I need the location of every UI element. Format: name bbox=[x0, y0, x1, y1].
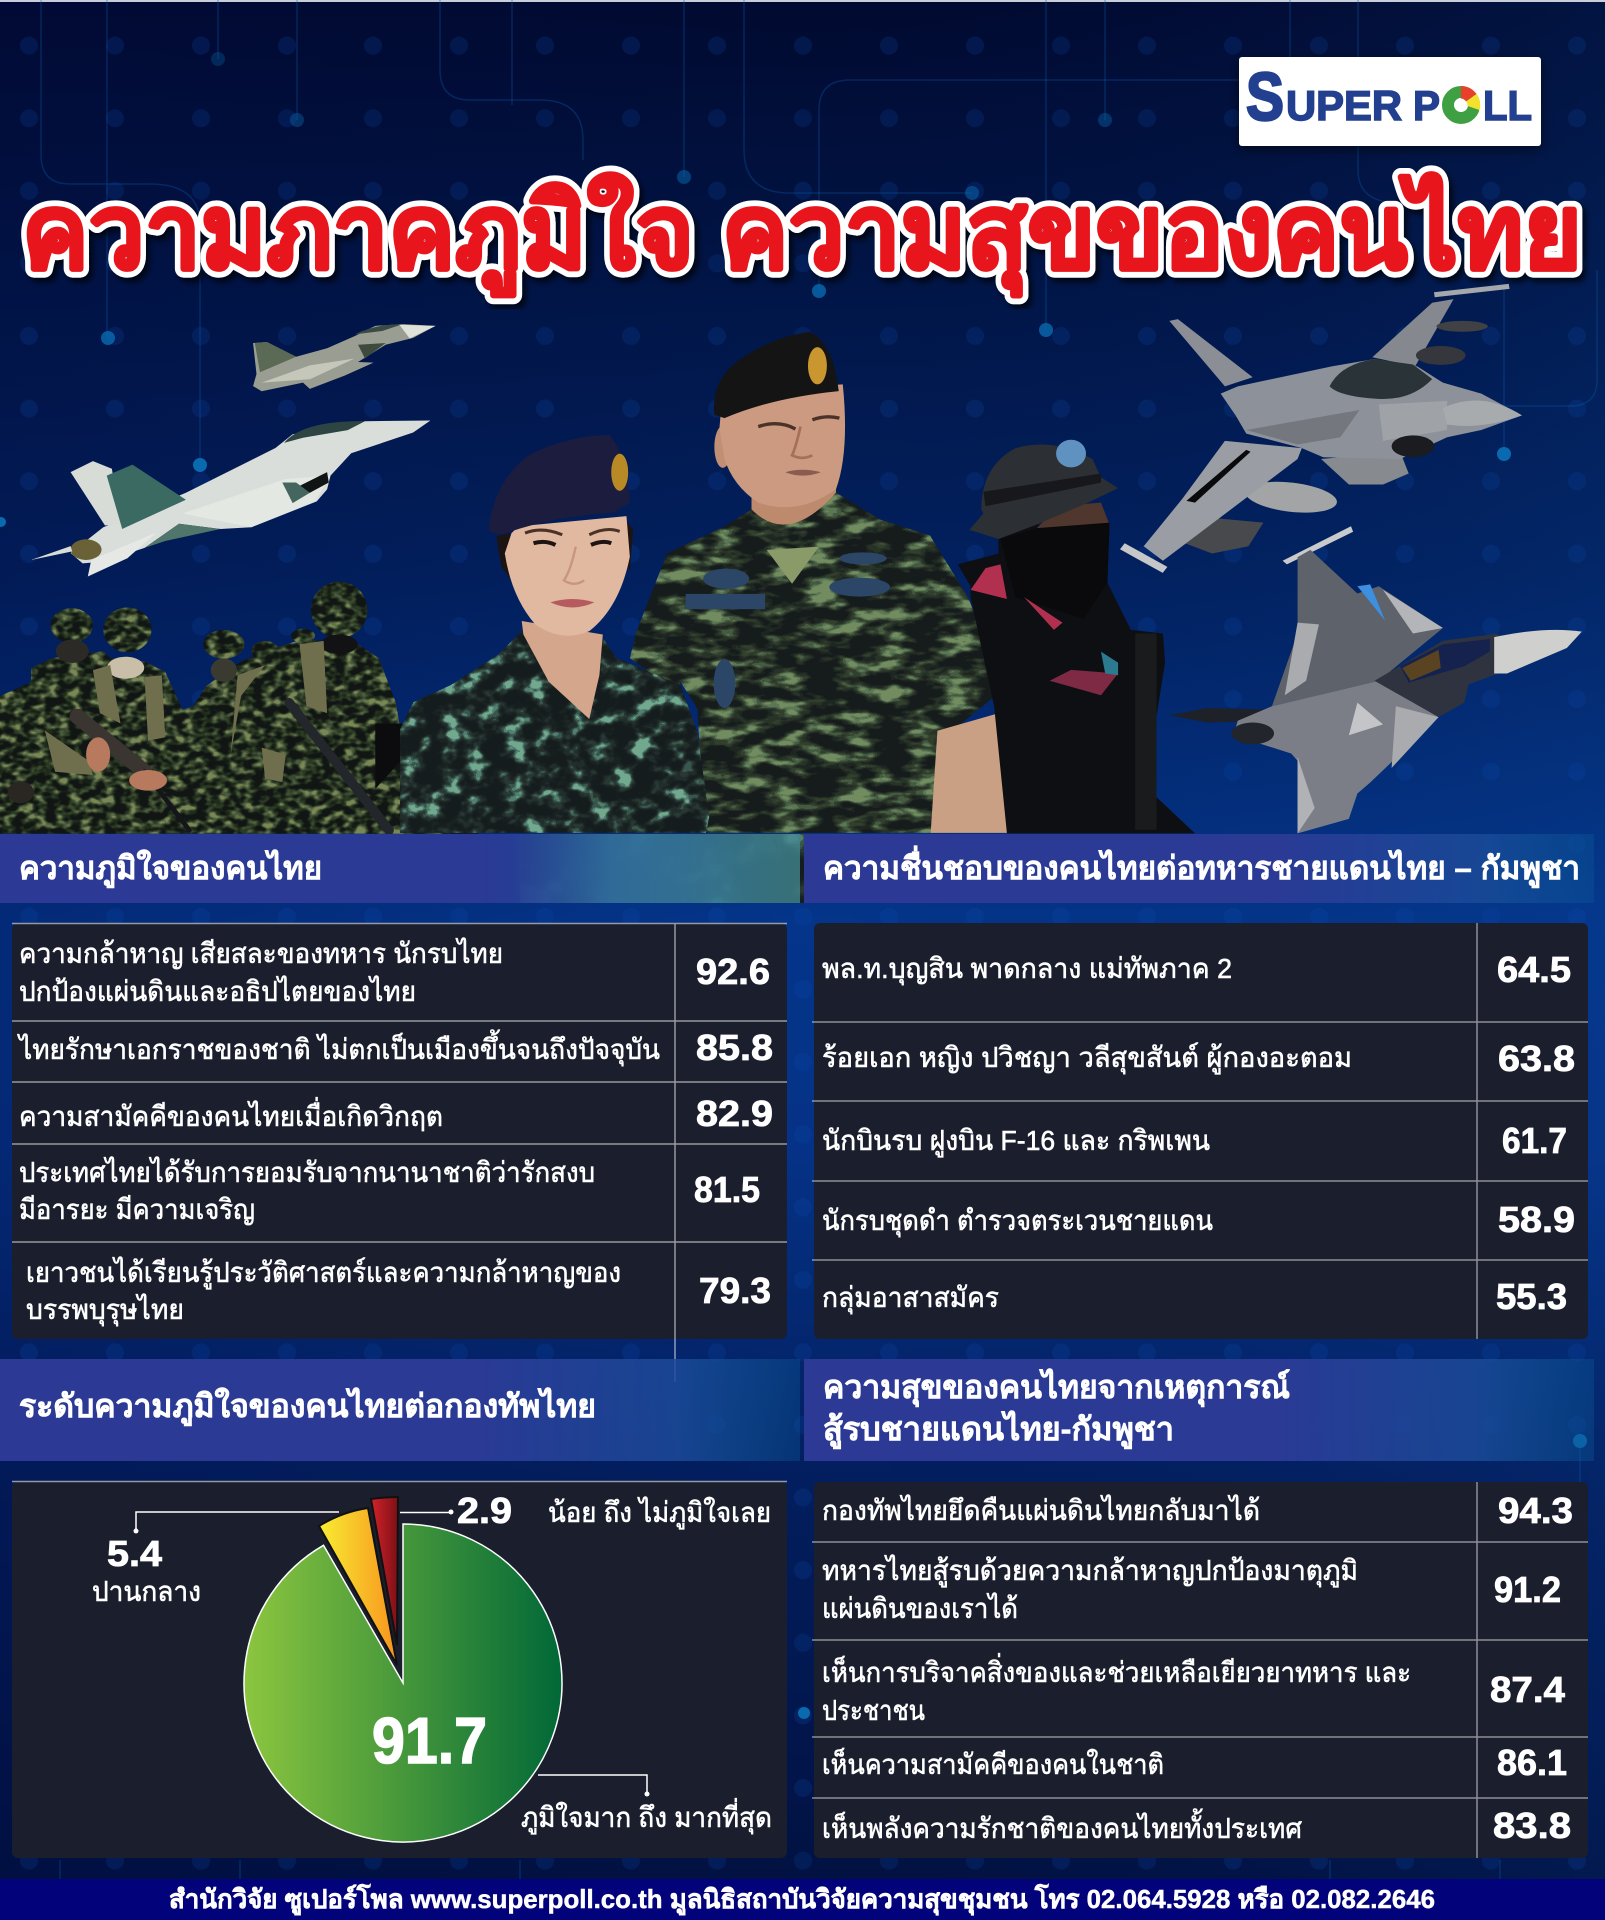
row 1: 92.6 bbox=[696, 951, 770, 992]
row 2: 91.2 bbox=[1494, 1569, 1561, 1610]
row 2: ทหารไทยสู้รบด้วยความกล้าหาญปกป้องมาตุภูมิ bbox=[822, 1555, 1358, 1588]
masked ranger bbox=[958, 440, 1195, 833]
row 4 bbox=[19, 1157, 760, 1225]
row 5 bbox=[822, 1805, 1571, 1846]
panel: pride table bbox=[12, 923, 787, 1382]
jet: f-16 upper right bbox=[1122, 286, 1522, 570]
panel: pie chart bbox=[12, 1481, 787, 1858]
woman in beret bbox=[400, 435, 709, 833]
row 4: 86.1 bbox=[1497, 1742, 1567, 1783]
row 5: 55.3 bbox=[1496, 1276, 1567, 1317]
jet: large fighter left bbox=[31, 421, 430, 576]
jet: gripen lower right bbox=[1169, 526, 1582, 833]
row 3: ความสามัคคีของคนไทยเมื่อเกิดวิกฤต bbox=[19, 1097, 443, 1132]
logo: super poll: LL bbox=[1483, 82, 1532, 129]
row 4: เห็นความสามัคคีของคนในชาติ bbox=[822, 1747, 1164, 1780]
row 1 bbox=[822, 1490, 1573, 1531]
panel: happiness table bbox=[812, 1482, 1588, 1858]
header: level of pride in army: ระดับความภูมิใจของคนไทยต่อกองทัพไทย bbox=[19, 1387, 596, 1427]
row 5 bbox=[822, 1276, 1567, 1317]
label high pride: ภูมิใจมาก ถึง มากที่สุด bbox=[521, 1798, 772, 1835]
header: pride of thais bbox=[0, 834, 804, 903]
row 2: แผ่นดินของเราได้ bbox=[822, 1593, 1018, 1624]
row 3: นักบินรบ ฝูงบิน F-16 และ กริพเพน bbox=[822, 1125, 1210, 1158]
label moderate: ปานกลาง bbox=[92, 1576, 201, 1607]
header: liking of border soldiers bbox=[804, 834, 1594, 903]
row 2 bbox=[17, 1027, 773, 1068]
row 2: ร้อยเอก หญิง ปวิชญา วลีสุขสันต์ ผู้กองอะตอม bbox=[822, 1042, 1352, 1075]
row 5: 79.3 bbox=[699, 1270, 771, 1311]
row 1: 64.5 bbox=[1497, 949, 1571, 990]
row 3: 61.7 bbox=[1502, 1120, 1567, 1161]
row 1: กองทัพไทยยึดคืนแผ่นดินไทยกลับมาได้ bbox=[822, 1495, 1260, 1526]
row 2 bbox=[822, 1038, 1575, 1079]
value 91.7: 91.7 bbox=[372, 1704, 487, 1777]
row 4: ประเทศไทยได้รับการยอมรับจากนานาชาติว่ารักสงบ bbox=[19, 1157, 595, 1188]
row 3: เห็นการบริจาคสิ่งของและช่วยเหลือเยียวยาทหาร และ bbox=[822, 1653, 1411, 1688]
pie slices bbox=[244, 1497, 562, 1842]
footer: สำนักวิจัย ซูเปอร์โพล www.superpoll.co.th มูลนิธิสถาบันวิจัยความสุขชุมชน โทร 02.064.5928 หรือ 02.082.2646 bbox=[169, 1883, 1435, 1916]
row 1: 94.3 bbox=[1498, 1490, 1573, 1531]
footer bbox=[0, 1879, 1605, 1920]
row 5: เห็นพลังความรักชาติของคนไทยทั้งประเทศ bbox=[822, 1808, 1302, 1844]
row 5 bbox=[26, 1257, 771, 1327]
row 3: 82.9 bbox=[696, 1093, 773, 1134]
row 3: 87.4 bbox=[1490, 1669, 1565, 1710]
row 4 bbox=[822, 1199, 1575, 1240]
panel: liking table bbox=[812, 923, 1588, 1339]
logo: super poll: P bbox=[1413, 82, 1440, 129]
row 3 bbox=[822, 1653, 1565, 1726]
row 4: มีอารยะ มีความเจริญ bbox=[19, 1194, 255, 1225]
value 5.4: 5.4 bbox=[107, 1533, 162, 1574]
row 4: 58.9 bbox=[1498, 1199, 1575, 1240]
row 2: 85.8 bbox=[696, 1027, 773, 1068]
header: happiness from border conflict: ความสุขของคนไทยจากเหตุการณ์ bbox=[823, 1368, 1290, 1408]
title: ความภาคภูมิใจ ความสุขของคนไทย bbox=[22, 173, 1582, 297]
leader lines bbox=[134, 1510, 650, 1796]
man in beret bbox=[630, 332, 1010, 833]
row 4: 81.5 bbox=[694, 1169, 760, 1210]
jet: small gripen upper left bbox=[253, 324, 436, 391]
soldiers group bbox=[0, 582, 479, 834]
logo: super poll: UPER bbox=[1286, 82, 1402, 129]
value 2.9: 2.9 bbox=[457, 1490, 512, 1531]
row 5: บรรพบุรุษไทย bbox=[26, 1294, 184, 1327]
title: ความภาคภูมิใจ ความสุขของคนไทย bbox=[22, 173, 1582, 297]
label low pride: น้อย ถึง ไม่ภูมิใจเลย bbox=[548, 1496, 771, 1530]
header: liking of border soldiers: ความชื่นชอบของคนไทยต่อทหารชายแดนไทย – กัมพูชา bbox=[823, 845, 1580, 889]
row 2 bbox=[822, 1555, 1561, 1624]
row 1: ปกป้องแผ่นดินและอธิปไตยของไทย bbox=[19, 976, 416, 1007]
row 5: 83.8 bbox=[1493, 1805, 1571, 1846]
row 2: ไทยรักษาเอกราชของชาติ ไม่ตกเป็นเมืองขึ้นจนถึงปัจจุบัน bbox=[17, 1029, 660, 1067]
row 1: ความกล้าหาญ เสียสละของทหาร นักรบไทย bbox=[19, 938, 503, 969]
logo: super poll bbox=[1239, 57, 1541, 146]
row 3 bbox=[19, 1093, 773, 1134]
row 1: พล.ท.บุญสิน พาดกลาง แม่ทัพภาค 2 bbox=[822, 953, 1232, 986]
row 4 bbox=[822, 1742, 1567, 1783]
row 3: ประชาชน bbox=[822, 1695, 925, 1726]
header: happiness from border conflict bbox=[804, 1359, 1594, 1461]
row 5: เยาวชนได้เรียนรู้ประวัติศาสตร์และความกล้าหาญของ bbox=[26, 1257, 621, 1290]
header: pride of thais: ความภูมิใจของคนไทย bbox=[19, 849, 322, 889]
row 1 bbox=[19, 938, 770, 1007]
row 1 bbox=[822, 949, 1571, 990]
header: happiness from border conflict: สู้รบชายแดนไทย-กัมพูชา bbox=[823, 1410, 1174, 1450]
logo: super poll: S bbox=[1246, 59, 1284, 135]
row 5: กลุ่มอาสาสมัคร bbox=[822, 1282, 999, 1315]
row 3 bbox=[822, 1120, 1567, 1161]
row 2: 63.8 bbox=[1498, 1038, 1575, 1079]
row 4: นักรบชุดดำ ตำรวจตระเวนชายแดน bbox=[822, 1205, 1213, 1238]
title: ความภาคภูมิใจ ความสุขของคนไทย bbox=[22, 173, 1582, 297]
header: level of pride in army bbox=[0, 1359, 800, 1461]
